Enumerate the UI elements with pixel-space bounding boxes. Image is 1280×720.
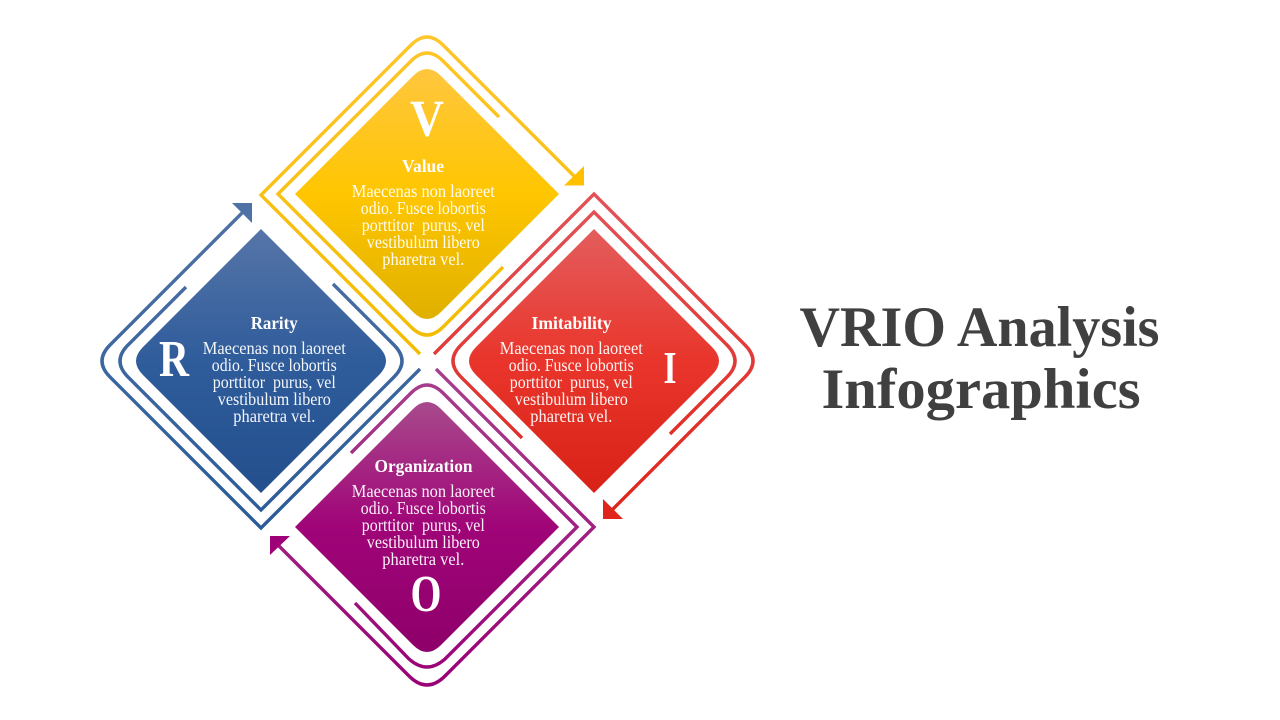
heading: Imitability: Imitability — [532, 313, 612, 333]
text block: Value: pharetra vel. — [382, 249, 464, 269]
text block: Value: porttitor purus, vel — [362, 215, 485, 235]
letter: O: O — [410, 566, 442, 623]
text block: Organization: odio. Fusce lobortis — [361, 498, 486, 518]
letter: V: V — [410, 90, 444, 148]
panel: Rarity — [102, 203, 420, 528]
text block: Organization: Maecenas non laoreet — [352, 481, 495, 501]
inner line: Organization — [351, 385, 577, 667]
title: Infographics — [822, 358, 1140, 421]
outer arrow line: Organization — [277, 369, 594, 685]
text block: Value: vestibulum libero — [367, 232, 480, 252]
arrowhead: Imitability — [603, 499, 623, 519]
text block: Organization — [352, 481, 495, 569]
arrowhead: Value — [564, 166, 584, 186]
text block: Organization: vestibulum libero — [367, 532, 480, 552]
arrowhead: Rarity — [232, 203, 252, 223]
title: VRIO Analysis — [800, 296, 1160, 359]
text block: Imitability: Maecenas non laoreet — [500, 338, 643, 358]
text block: Rarity: porttitor purus, vel — [213, 372, 336, 392]
text block: Rarity: vestibulum libero — [218, 389, 331, 409]
diamond: Value — [295, 69, 559, 319]
heading: Rarity: Rarity — [251, 313, 298, 333]
text block: Rarity: odio. Fusce lobortis — [212, 355, 337, 375]
text block: Value: Maecenas non laoreet — [352, 181, 495, 201]
text block: Imitability: porttitor purus, vel — [510, 372, 633, 392]
title — [800, 296, 1160, 421]
arrowhead: Organization — [270, 536, 290, 555]
outer arrow line: Rarity — [102, 210, 420, 528]
letter: R: R — [159, 331, 190, 388]
diamond: Organization — [295, 402, 559, 652]
text block: Value: odio. Fusce lobortis — [361, 198, 486, 218]
text block: Imitability: odio. Fusce lobortis — [509, 355, 634, 375]
text block: Value — [352, 181, 495, 269]
heading: Value: Value — [402, 156, 444, 176]
heading: Organization: Organization — [374, 456, 472, 476]
text block: Rarity: Maecenas non laoreet — [203, 338, 346, 358]
text block: Imitability: pharetra vel. — [530, 406, 612, 426]
outer arrow line: Imitability — [434, 194, 753, 512]
letter: I: I — [664, 342, 676, 393]
inner line: Rarity — [120, 284, 402, 510]
text block: Rarity: pharetra vel. — [233, 406, 315, 426]
text block: Organization: pharetra vel. — [382, 549, 464, 569]
inner line: Imitability — [453, 212, 735, 438]
text block: Imitability: vestibulum libero — [515, 389, 628, 409]
text block: Rarity — [203, 338, 346, 426]
diamond: Rarity — [136, 229, 386, 493]
panel: Value — [261, 37, 584, 354]
panel: Organization — [270, 369, 594, 685]
diamond: Imitability — [469, 229, 719, 493]
text block: Organization: porttitor purus, vel — [362, 515, 485, 535]
text block: Imitability — [500, 338, 643, 426]
panel: Imitability — [434, 194, 753, 519]
outer arrow line: Value — [261, 37, 577, 354]
inner line: Value — [278, 53, 503, 335]
